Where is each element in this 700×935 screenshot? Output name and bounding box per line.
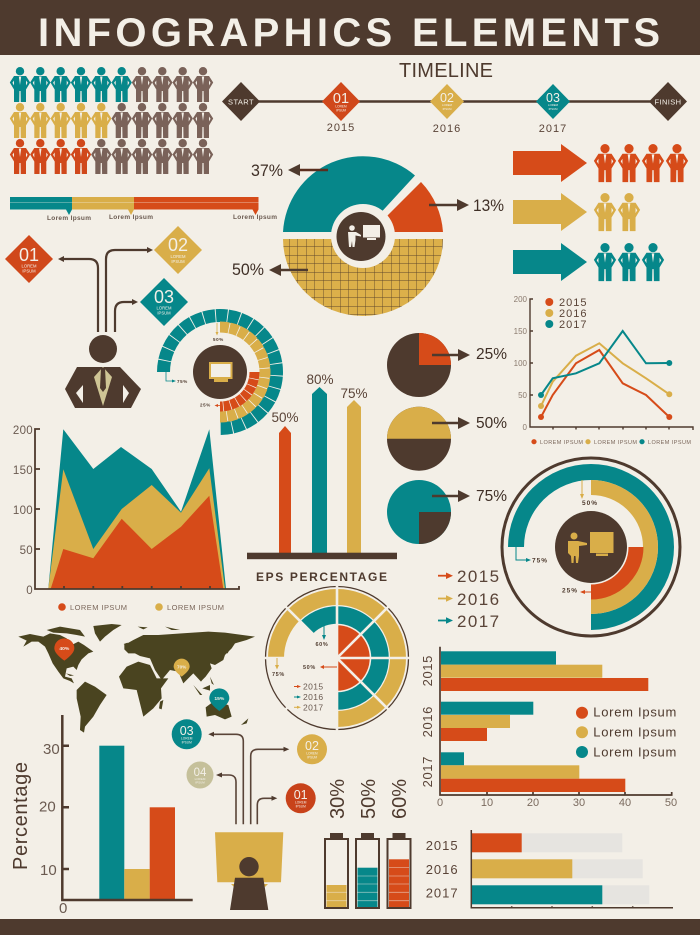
diamond 03: IPSUM — [157, 310, 171, 316]
battery 30% — [325, 779, 349, 908]
EPS legend: 2015 — [303, 682, 324, 692]
line chart — [514, 295, 693, 446]
circle 02: LOREM — [306, 752, 318, 756]
pie label 37% — [251, 162, 328, 180]
circle 03: 03 — [180, 724, 194, 738]
pie label 13% — [429, 197, 504, 215]
area chart legend — [58, 603, 224, 612]
vertical bar chart: 20 — [39, 799, 56, 816]
connector arrows from businessman — [58, 247, 153, 332]
area chart: 0 — [26, 585, 33, 597]
area chart: 150 — [13, 465, 33, 477]
landmass: Eurasia, Africa and Oceania — [119, 627, 255, 725]
segmented progress bar: Lorem Ipsum — [47, 215, 91, 222]
diamond 01: LOREM — [22, 264, 37, 268]
label 75%: 75% — [532, 558, 548, 564]
circle 02: IPSUM — [307, 756, 317, 760]
circle 01: IPSUM — [296, 804, 306, 808]
icon: businessman — [65, 335, 141, 408]
line chart year legend: 2017 — [559, 319, 587, 331]
vertical bar chart: 10 — [40, 862, 57, 879]
connector arrows from monitor — [208, 732, 289, 824]
label 60% — [316, 623, 328, 648]
pie 25% — [387, 333, 507, 397]
line chart year legend: 2016 — [559, 308, 587, 320]
timeline — [222, 60, 687, 135]
circle 01: LOREM — [295, 800, 307, 804]
area chart: 100 — [13, 505, 33, 517]
map pin 15% — [209, 688, 229, 711]
start marker: START — [228, 98, 254, 106]
header band — [0, 0, 700, 55]
progress bars by year: 2017 — [426, 886, 459, 901]
line chart: 50 — [518, 391, 528, 400]
milestone 03: 2017 — [539, 123, 567, 135]
pencil bar chart: 80% — [306, 372, 334, 387]
label 25% — [562, 588, 591, 594]
icon: monitor — [209, 362, 232, 382]
battery 30%: 30% — [327, 779, 349, 819]
horizontal grouped bar chart: 2016 — [420, 706, 435, 737]
label 75%: 75% — [177, 379, 188, 384]
horizontal grouped bar chart: 0 — [437, 797, 443, 809]
milestone 03 — [536, 84, 570, 135]
horizontal grouped bar chart — [420, 647, 677, 809]
start marker — [222, 82, 260, 121]
battery 50%: 50% — [358, 779, 380, 819]
diamond 02: LOREM — [171, 254, 186, 259]
icon: person at monitor — [215, 832, 283, 910]
label 25%: 25% — [562, 588, 578, 594]
pie label 50%: 50% — [232, 261, 264, 279]
icon: presenter at board — [348, 225, 380, 247]
pie label 50% — [232, 261, 308, 279]
y axis title: Percentage — [10, 762, 32, 870]
battery 60%: 60% — [389, 779, 411, 819]
circle 04 — [186, 762, 214, 788]
milestone 02: IPSUM — [443, 107, 452, 111]
circle 02: 02 — [305, 739, 319, 753]
progress bars by year — [426, 830, 673, 908]
EPS legend — [294, 682, 324, 712]
horizontal grouped bar chart: 30 — [573, 797, 585, 809]
map pin 40%: 40% — [59, 646, 70, 652]
horizontal grouped bar chart: 50 — [665, 797, 677, 809]
EPS legend: 2016 — [303, 692, 324, 702]
diamond 03: 03 — [154, 287, 174, 307]
line chart bottom legend: LOREM IPSUM — [540, 440, 583, 446]
milestone 03: 03 — [546, 91, 560, 105]
bar chart legend — [576, 705, 676, 760]
line chart: 200 — [514, 295, 528, 304]
pencil bar chart — [247, 372, 397, 559]
map pin 40% — [54, 638, 74, 661]
segmented progress bar — [10, 197, 277, 222]
area chart: 50 — [20, 545, 33, 557]
area chart: 200 — [13, 425, 33, 437]
map pin 15%: 15% — [214, 696, 225, 702]
diamond 01: IPSUM — [22, 268, 36, 274]
pie 25%: 25% — [476, 346, 507, 363]
milestone 02 — [430, 84, 464, 135]
landmass: the Americas and Greenland — [18, 624, 122, 733]
line chart bottom legend: LOREM IPSUM — [594, 440, 637, 446]
milestone 01: IPSUM — [336, 108, 346, 112]
circle 02 — [297, 734, 327, 764]
title: INFOGRAPHICS ELEMENTS — [38, 11, 660, 55]
people pictogram grid — [10, 67, 213, 174]
circle 03: LOREM — [181, 736, 193, 740]
bar chart legend: Lorem Ipsum — [593, 745, 676, 760]
footer band — [0, 919, 700, 935]
map pin 70%: 70% — [177, 664, 187, 669]
arrow row: orange people — [513, 144, 688, 182]
EPS legend: 2017 — [303, 702, 324, 712]
milestone 02: 2016 — [433, 123, 461, 135]
year legend with arrows — [438, 567, 500, 631]
large radial chart — [502, 458, 680, 636]
pie 75% — [387, 480, 507, 544]
line chart year legend: 2015 — [559, 297, 587, 309]
horizontal grouped bar chart: 20 — [527, 797, 539, 809]
vertical bar chart: 0 — [59, 900, 67, 917]
milestone 01: 01 — [333, 91, 349, 107]
circle 03: IPSUM — [182, 740, 192, 744]
horizontal grouped bar chart: 10 — [481, 797, 493, 809]
line chart: 150 — [514, 327, 528, 336]
finish marker — [649, 82, 687, 121]
circle 03 — [172, 719, 202, 749]
label 60%: 60% — [316, 642, 328, 648]
segmented progress bar: Lorem Ipsum — [233, 214, 277, 221]
milestone 03: IPSUM — [549, 107, 558, 111]
line chart year legend — [545, 297, 587, 331]
vertical bar chart: 30 — [43, 741, 60, 758]
area chart — [13, 425, 239, 612]
line chart: 100 — [514, 359, 528, 368]
circle 01: 01 — [294, 788, 308, 802]
bar chart legend: Lorem Ipsum — [593, 705, 676, 720]
arrow row: yellow people — [513, 193, 640, 231]
diamond 03: LOREM — [157, 306, 172, 310]
pie label 13%: 13% — [473, 197, 504, 215]
year legend with arrows: 2016 — [457, 590, 500, 609]
circle 04: IPSUM — [195, 780, 205, 784]
year legend with arrows: 2017 — [457, 612, 500, 631]
pie 50% — [387, 407, 507, 471]
pie label 37%: 37% — [251, 162, 283, 180]
label 50%: 50% — [303, 665, 316, 671]
line chart bottom legend: LOREM IPSUM — [648, 440, 691, 446]
line chart: 0 — [523, 423, 528, 432]
area chart legend: LOREM IPSUM — [167, 603, 224, 612]
timeline heading: TIMELINE — [399, 60, 493, 82]
label 50% — [303, 665, 337, 671]
arrow row: teal people — [513, 243, 664, 281]
vertical bar chart — [10, 715, 193, 917]
fan chart with monitor — [164, 316, 276, 428]
finish marker: FINISH — [655, 98, 681, 106]
battery 60% — [388, 779, 411, 908]
pencil bar chart: 75% — [340, 386, 368, 401]
diamond 02: 02 — [168, 235, 188, 255]
label 75%: 75% — [272, 672, 285, 678]
world map — [18, 624, 255, 733]
circle 04: LOREM — [195, 777, 206, 781]
diamond 01: 01 — [19, 245, 39, 265]
label 75% — [272, 658, 285, 678]
pie 50%: 50% — [476, 415, 507, 432]
milestone 01: LOREM — [335, 104, 347, 108]
horizontal grouped bar chart: 40 — [619, 797, 631, 809]
milestone 02: 02 — [440, 91, 454, 105]
diamond 01 — [5, 235, 53, 283]
horizontal grouped bar chart: 2017 — [420, 756, 435, 787]
milestone 02: LOREM — [442, 103, 453, 107]
EPS radial chart — [261, 582, 413, 734]
segmented progress bar: Lorem Ipsum — [109, 214, 153, 221]
diamond 02: IPSUM — [171, 259, 185, 264]
label 25%: 25% — [200, 402, 211, 408]
label 50%: 50% — [582, 500, 598, 507]
milestone 01 — [322, 82, 360, 134]
pencil bar chart: 50% — [271, 410, 299, 425]
horizontal grouped bar chart: 2015 — [420, 655, 435, 686]
EPS heading: EPS PERCENTAGE — [256, 570, 387, 584]
label 50%: 50% — [213, 337, 224, 342]
main pie chart — [283, 156, 443, 316]
progress bars by year: 2016 — [426, 862, 459, 877]
milestone 01: 2015 — [327, 122, 355, 134]
diamond 03 — [140, 278, 188, 326]
map pin 70% — [174, 659, 190, 677]
milestone 03: LOREM — [548, 103, 559, 107]
icon: presenter in yellow — [568, 532, 614, 563]
circle 01 — [286, 783, 316, 813]
diamond 02 — [154, 226, 202, 274]
circle 04: 04 — [194, 767, 207, 779]
year legend with arrows: 2015 — [457, 567, 500, 586]
pie 75%: 75% — [476, 488, 507, 505]
battery 50% — [356, 779, 380, 908]
progress bars by year: 2015 — [426, 838, 459, 853]
area chart legend: LOREM IPSUM — [70, 603, 127, 612]
bar chart legend: Lorem Ipsum — [593, 725, 676, 740]
label 75% — [516, 547, 548, 564]
line chart bottom legend — [531, 439, 691, 446]
label 50% — [580, 480, 598, 507]
